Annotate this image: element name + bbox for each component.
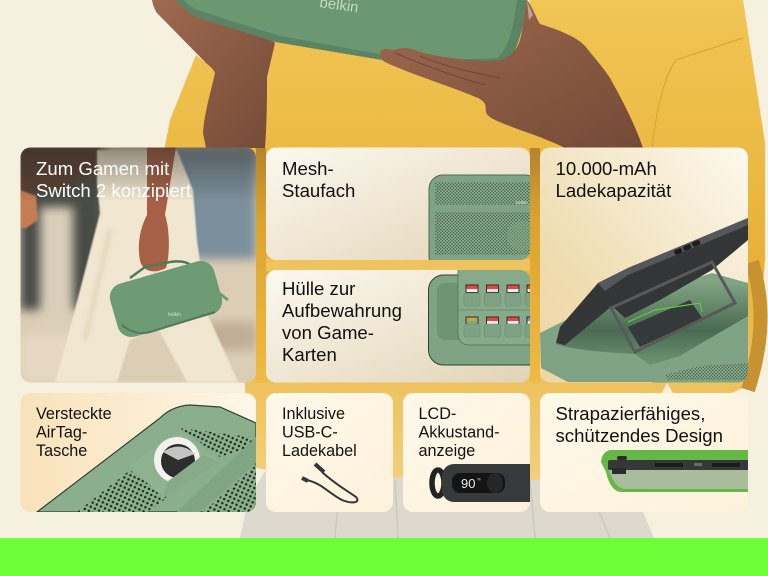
panel: Versteckte AirTag-Tasche: AirTag- bbox=[36, 424, 87, 442]
AirTag bbox=[154, 437, 200, 483]
panel: LCD-Akkustandanzeige: Akkustand- bbox=[418, 424, 499, 442]
left arm and hand bbox=[152, 0, 275, 148]
panel: Inklusive USB-C-Ladekabel: USB-C- bbox=[282, 424, 338, 442]
panel: Inklusive USB-C-Ladekabel bbox=[266, 393, 393, 512]
heading: Hülle zur bbox=[282, 278, 355, 299]
panel: Mesh-Staufach: Staufach bbox=[282, 180, 355, 201]
photo background bbox=[20, 147, 256, 383]
case base bbox=[540, 273, 748, 382]
panel: Strapazierfähiges, schützendes Design: schützendes Design bbox=[556, 425, 723, 446]
gaps between cards bbox=[256, 148, 266, 383]
bottom green band bbox=[0, 538, 768, 576]
panel: Hülle zur Aufbewahrung von Game-Karten: Aufbewahrung bbox=[282, 300, 402, 321]
strap bbox=[164, 456, 202, 498]
panel: 10.000-mAh Ladekapazität: Ladekapazität bbox=[556, 180, 672, 201]
panel: Inklusive USB-C-Ladekabel: Ladekabel bbox=[282, 442, 357, 460]
console body bbox=[556, 218, 748, 345]
panel: Versteckte AirTag-Tasche: Tasche bbox=[36, 442, 87, 460]
panel: Zum Gamen mit Switch 2 konzipiert bbox=[20, 147, 256, 383]
heading: Versteckte bbox=[36, 405, 112, 423]
panel: Strapazierfähiges, schützendes Design bbox=[540, 393, 760, 512]
shirt bbox=[165, 0, 765, 480]
power bank with LCD display: 90 bbox=[461, 476, 475, 491]
arm and hand bbox=[139, 147, 176, 271]
green bag bbox=[110, 261, 222, 337]
console in green case side view bbox=[601, 450, 760, 492]
game cards bbox=[466, 284, 530, 324]
console in open case illustration bbox=[540, 218, 748, 384]
panel: Zum Gamen mit Switch 2 konzipiert: Switch 2 konzipiert bbox=[36, 180, 192, 201]
power bank with LCD display bbox=[432, 464, 542, 502]
AirTag pocket illustration bbox=[37, 405, 256, 512]
panel: LCD-Akkustandanzeige: anzeige bbox=[418, 442, 475, 460]
charger inside bbox=[628, 300, 702, 347]
icon: USB-C cable bbox=[302, 464, 357, 502]
panel: Zum Gamen mit Switch 2 konzipiert: belkin bbox=[168, 312, 181, 318]
panel: Versteckte AirTag-Tasche bbox=[20, 393, 256, 512]
right hand bbox=[380, 0, 643, 148]
panel: Mesh-Staufach bbox=[266, 148, 530, 260]
panel: 10.000-mAh Ladekapazität bbox=[540, 148, 748, 384]
kickstand bbox=[611, 262, 735, 352]
pants bbox=[240, 466, 654, 538]
power bank with LCD display: % bbox=[477, 476, 481, 482]
game card holder illustration bbox=[428, 270, 530, 366]
case lid bbox=[652, 316, 748, 384]
bag handle bbox=[130, 261, 190, 278]
green case held in hands bbox=[176, 0, 527, 63]
heading: LCD- bbox=[418, 405, 456, 423]
heading: 10.000-mAh bbox=[556, 158, 657, 179]
mesh case illustration: belkin bbox=[516, 200, 528, 205]
mesh case illustration bbox=[428, 174, 530, 260]
pockets bbox=[464, 292, 530, 338]
panel: Hülle zur Aufbewahrung von Game-Karten: von Game- bbox=[282, 322, 374, 343]
heading: Inklusive bbox=[282, 405, 345, 423]
panel: LCD-Akkustandanzeige bbox=[403, 393, 542, 512]
heading: Mesh- bbox=[282, 158, 334, 179]
panel: Hülle zur Aufbewahrung von Game-Karten bbox=[266, 270, 530, 382]
heading: Zum Gamen mit bbox=[36, 158, 170, 179]
heading: Strapazierfähiges, bbox=[556, 403, 705, 424]
raised arm bbox=[20, 147, 100, 195]
photo: person in yellow shirt holding case bbox=[152, 0, 765, 538]
pants bbox=[55, 150, 238, 382]
panel: Hülle zur Aufbewahrung von Game-Karten: Karten bbox=[282, 344, 337, 365]
